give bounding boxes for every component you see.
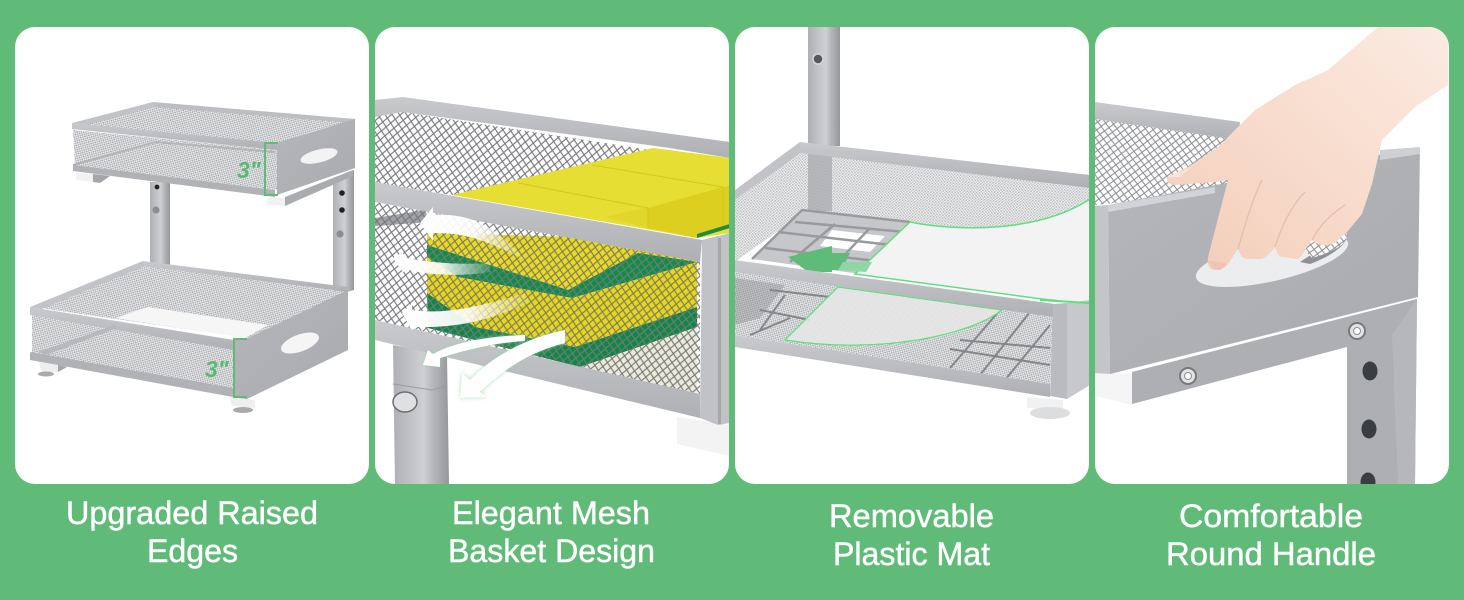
thumbnail bbox=[1167, 168, 1190, 177]
dimension: upper 3 inch bbox=[237, 143, 278, 195]
dark post through front mesh bbox=[735, 278, 785, 325]
leg and bracket bbox=[1132, 299, 1417, 492]
mat seen through mesh bbox=[785, 287, 1002, 345]
bolts bbox=[1180, 323, 1365, 384]
sponges behind mesh bbox=[427, 233, 697, 395]
caption: removable plastic mat: Removable bbox=[829, 498, 994, 534]
upper basket bbox=[72, 102, 355, 206]
index fingernail bbox=[1208, 261, 1226, 270]
handle opening bbox=[1191, 222, 1353, 298]
corner post bbox=[700, 233, 730, 425]
caption: upgraded raised edges: Edges bbox=[147, 533, 238, 569]
back rail and mesh bbox=[1095, 102, 1240, 205]
plastic mat bbox=[855, 199, 1090, 304]
foot bbox=[1027, 397, 1070, 419]
airflow arrows bbox=[393, 207, 565, 398]
panel: removable plastic mat bbox=[735, 27, 1090, 484]
hand bbox=[1167, 27, 1448, 270]
caption: elegant mesh basket design bbox=[448, 495, 655, 569]
caption: comfortable round handle: Round Handle bbox=[1166, 536, 1376, 572]
leg bbox=[393, 345, 449, 484]
yellow trays bbox=[452, 148, 730, 238]
back mesh wall bbox=[375, 112, 650, 195]
back and left rails bbox=[735, 142, 1090, 200]
post behind mesh bbox=[808, 153, 832, 211]
right post bbox=[333, 170, 354, 296]
front mesh bbox=[375, 202, 700, 394]
caption: elegant mesh basket design: Basket Design bbox=[448, 533, 655, 569]
handle bbox=[281, 332, 319, 354]
arrow 3 bbox=[402, 293, 530, 330]
back mesh wall bbox=[800, 153, 1089, 228]
arrow 1 bbox=[420, 207, 525, 260]
green arrow bbox=[788, 246, 872, 272]
panel: elegant mesh basket bbox=[375, 27, 730, 484]
rear post bbox=[150, 182, 170, 270]
white foot bbox=[1095, 372, 1132, 405]
front bottom rail bbox=[375, 320, 700, 418]
arrow 5 bbox=[460, 330, 565, 398]
front top rail bbox=[735, 260, 1055, 317]
panel: comfortable round handle bbox=[1095, 27, 1449, 492]
arrow 5 glow bbox=[460, 330, 565, 398]
corner post and side bbox=[1040, 300, 1090, 399]
caption: upgraded raised edges bbox=[66, 495, 318, 569]
left mesh backing rail bbox=[375, 210, 430, 226]
white foot bbox=[677, 417, 730, 456]
panel: upgraded raised edges bbox=[15, 27, 369, 484]
finger lines bbox=[1238, 180, 1345, 249]
lower basket bbox=[30, 261, 348, 413]
front bottom rail bbox=[735, 335, 1050, 397]
caption: comfortable round handle bbox=[1166, 498, 1376, 572]
dimension: upper 3 inch: 3" bbox=[237, 157, 262, 183]
nut bbox=[393, 392, 417, 412]
front mesh bbox=[735, 272, 1053, 384]
caption: removable plastic mat bbox=[829, 498, 994, 572]
front top rail bbox=[375, 182, 702, 262]
arrow 2 bbox=[393, 252, 490, 275]
handle bbox=[300, 148, 338, 164]
arrow 4 glow bbox=[423, 335, 525, 367]
grid wires under bbox=[750, 290, 1050, 380]
wire shelf bbox=[752, 210, 910, 274]
left mesh wall bbox=[735, 152, 800, 262]
caption: upgraded raised edges: Upgraded Raised bbox=[66, 495, 318, 531]
arrow 4 bbox=[423, 335, 525, 367]
white mat bbox=[115, 307, 268, 338]
post bbox=[808, 27, 840, 146]
caption: elegant mesh basket design: Elegant Mesh bbox=[452, 495, 650, 531]
back rail bbox=[375, 97, 730, 158]
dimension: lower 3 inch: 3" bbox=[205, 356, 230, 382]
basket side panel bbox=[1095, 147, 1420, 374]
caption: removable plastic mat: Plastic Mat bbox=[833, 536, 990, 572]
dimension: lower 3 inch bbox=[205, 339, 247, 397]
caption: comfortable round handle: Comfortable bbox=[1179, 498, 1363, 534]
